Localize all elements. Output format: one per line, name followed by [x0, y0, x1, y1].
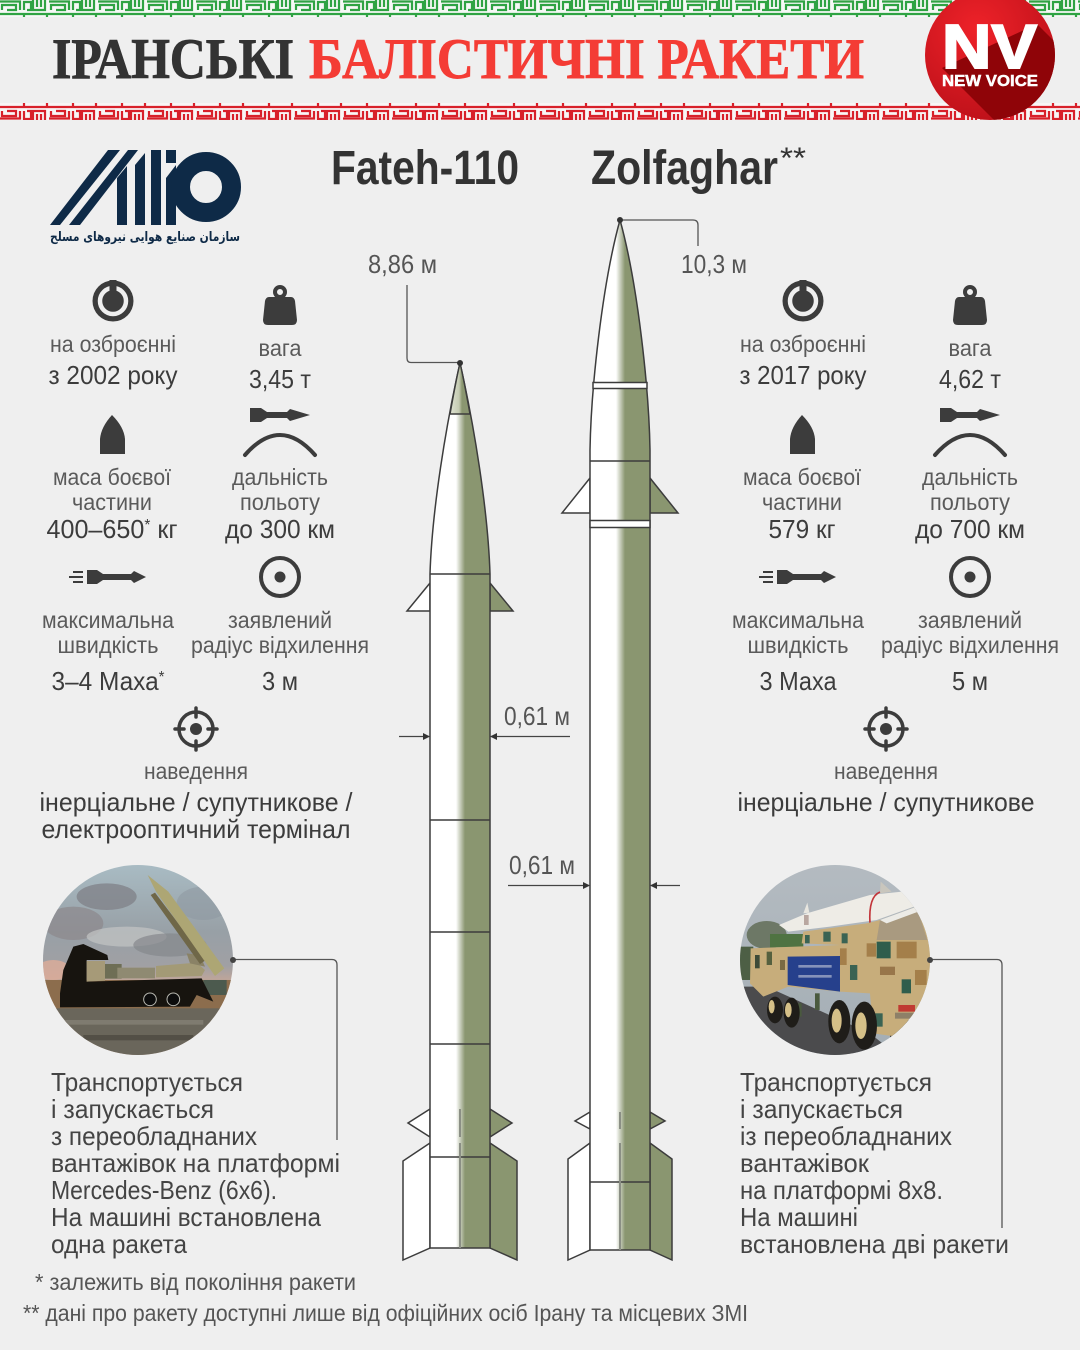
spec: range: дальність — [922, 464, 1018, 490]
spec: CEP: радіус відхилення — [881, 632, 1059, 658]
text block: Fateh-110 launcher: Транспортується — [51, 1067, 243, 1097]
spec: weight — [249, 335, 311, 394]
icon: warhead — [790, 415, 815, 454]
spec: max speed: 3 Маха — [760, 666, 837, 696]
spec: in service — [48, 331, 178, 390]
spec: warhead mass: частини — [72, 489, 152, 515]
spec: in service — [740, 331, 866, 390]
spec: max speed: максимальна — [42, 607, 174, 633]
spec: weight: вага — [258, 335, 302, 361]
spec: warhead mass — [46, 464, 178, 544]
dimension: Zolfaghar diameter: 0,61 м — [509, 850, 575, 880]
heading: Zolfaghar: ** — [780, 142, 806, 175]
spec: warhead mass: 579 кг — [768, 514, 836, 544]
text block: Fateh-110 launcher: одна ракета — [51, 1229, 187, 1259]
text block: Fateh-110 launcher: На машині встановлена — [51, 1202, 321, 1232]
spec: CEP: 3 м — [262, 666, 298, 696]
icon: guidance — [175, 708, 217, 750]
spec: warhead mass: маса боєвої — [743, 464, 862, 490]
spec: range — [225, 464, 335, 544]
leader: Zolfaghar height — [617, 217, 747, 279]
red ornamental band — [0, 103, 1080, 120]
heading: Zolfaghar: Zolfaghar — [591, 142, 778, 195]
callout line: Fateh-110 photo — [230, 957, 337, 1140]
title: ІРАНСЬКІ — [52, 28, 294, 91]
spec: guidance: наведення — [144, 758, 248, 784]
spec: weight: вага — [948, 335, 992, 361]
spec: warhead mass: частини — [762, 489, 842, 515]
spec: guidance: наведення — [834, 758, 938, 784]
spec: CEP — [881, 607, 1059, 696]
leader: Zolfaghar height: 10,3 м — [681, 249, 747, 279]
text block: Fateh-110 launcher: Mercedes-Benz (6x6). — [51, 1175, 277, 1205]
spec: in service: на озброєнні — [50, 331, 176, 357]
dimension: Fateh-110 diameter — [399, 701, 570, 740]
icon: target — [261, 558, 299, 596]
panel: Fateh-110 specifications — [40, 280, 369, 844]
icon: speed — [69, 570, 146, 584]
spec: range: польоту — [930, 489, 1010, 515]
spec: range: до 700 км — [915, 514, 1025, 544]
spec: max speed — [42, 607, 174, 696]
text block: Zolfaghar launcher: і запускається — [740, 1094, 903, 1124]
icon: speed — [759, 570, 836, 584]
leader: Fateh-110 height: 8,86 м — [368, 249, 437, 279]
photo: Fateh-110 launcher truck — [37, 863, 237, 1062]
spec: CEP — [191, 607, 369, 696]
spec: CEP: заявлений — [918, 607, 1022, 633]
logo: NV New Voice: NEW VOICE — [942, 73, 1038, 90]
icon: range — [245, 408, 315, 455]
spec: range — [915, 464, 1025, 544]
spec: weight: 4,62 т — [939, 364, 1001, 394]
logo: Iranian aerospace organisation: سازمان صنایع هوایی نیروهای مسلح — [50, 230, 240, 245]
text block: Fateh-110 launcher: вантажівок на платформі — [51, 1148, 340, 1178]
text block: Fateh-110 launcher: з переобладнаних — [51, 1121, 257, 1151]
text block: Fateh-110 launcher — [51, 1067, 340, 1259]
icon: power — [92, 280, 134, 322]
spec: range: до 300 км — [225, 514, 335, 544]
spec: weight — [939, 335, 1001, 394]
spec: warhead mass: маса боєвої — [53, 464, 172, 490]
spec: range: дальність — [232, 464, 328, 490]
logo: Iranian aerospace organisation — [50, 150, 240, 245]
rocket: Fateh-110 — [403, 363, 517, 1260]
spec: guidance — [738, 758, 1034, 817]
text block: Zolfaghar launcher: На машині — [740, 1202, 858, 1232]
spec: in service: з 2002 року — [48, 360, 178, 390]
spec: range: польоту — [240, 489, 320, 515]
text block: Zolfaghar launcher: встановлена дві ракети — [740, 1229, 1009, 1259]
text block: Zolfaghar launcher: на платформі 8х8. — [740, 1175, 943, 1205]
spec: guidance: електрооптичний термінал — [42, 814, 350, 844]
icon: range — [935, 408, 1005, 455]
spec: weight: 3,45 т — [249, 364, 311, 394]
spec: warhead mass: * — [144, 517, 150, 534]
icon: weight — [953, 287, 987, 325]
spec: guidance: інерціальне / супутникове — [738, 787, 1034, 817]
panel: Zolfaghar specifications — [732, 280, 1059, 817]
spec: guidance: інерціальне / супутникове / — [40, 787, 353, 817]
spec: max speed: * — [159, 669, 165, 686]
spec: warhead mass: кг — [150, 514, 178, 544]
heading: Fateh-110: Fateh-110 — [331, 142, 519, 195]
icon: weight — [263, 287, 297, 325]
logo: NV New Voice: NV — [942, 13, 1037, 82]
callout line: Zolfaghar photo — [927, 957, 1002, 1228]
spec: in service: з 2017 року — [740, 360, 866, 390]
spec: warhead mass — [743, 464, 862, 544]
rocket: Zolfaghar — [562, 220, 678, 1260]
icon: guidance — [865, 708, 907, 750]
text block: Zolfaghar launcher: Транспортується — [740, 1067, 932, 1097]
green ornamental band — [0, 0, 1080, 17]
text block: Zolfaghar launcher — [740, 1067, 1009, 1259]
leader: Fateh-110 height — [368, 249, 463, 366]
footnotes: * залежить від покоління ракети — [35, 1269, 356, 1295]
footnotes — [23, 1269, 748, 1326]
footnotes: ** дані про ракету доступні лише від офіційних осіб Ірану та місцевих ЗМІ — [23, 1300, 748, 1326]
spec: CEP: заявлений — [228, 607, 332, 633]
icon: power — [782, 280, 824, 322]
text block: Fateh-110 launcher: і запускається — [51, 1094, 214, 1124]
spec: max speed: 3–4 Маха — [52, 666, 166, 696]
icon: target — [951, 558, 989, 596]
spec: warhead mass: 400–650 — [46, 514, 148, 544]
spec: max speed — [732, 607, 864, 696]
spec: guidance — [40, 758, 353, 844]
photo: Zolfaghar launcher truck — [740, 863, 937, 1060]
dimension: Zolfaghar diameter — [508, 850, 680, 889]
spec: in service: на озброєнні — [740, 331, 866, 357]
logo: NV New Voice — [925, 0, 1055, 120]
spec: CEP: радіус відхилення — [191, 632, 369, 658]
title: БАЛІСТИЧНІ РАКЕТИ — [309, 28, 864, 91]
dimension: Fateh-110 diameter: 0,61 м — [504, 701, 570, 731]
icon: warhead — [100, 415, 125, 454]
spec: max speed: максимальна — [732, 607, 864, 633]
spec: max speed: швидкість — [748, 632, 849, 658]
spec: max speed: швидкість — [58, 632, 159, 658]
text block: Zolfaghar launcher: вантажівок — [740, 1148, 870, 1178]
spec: CEP: 5 м — [952, 666, 988, 696]
text block: Zolfaghar launcher: із переобладнаних — [740, 1121, 952, 1151]
